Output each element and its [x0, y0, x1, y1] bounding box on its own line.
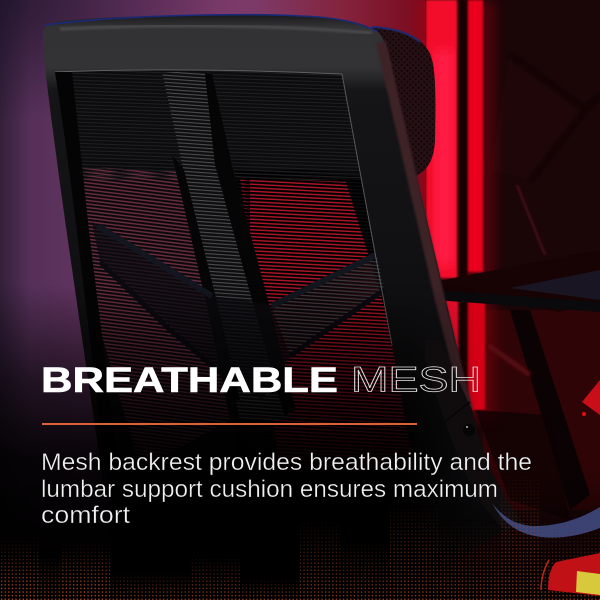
- red neon light stripes: [415, 0, 495, 420]
- bottom dark fade over left and centre: [0, 294, 476, 600]
- title: MESH: [351, 360, 481, 400]
- chair lower frame and seat: [425, 340, 600, 538]
- desk: [433, 250, 600, 520]
- bottom fade across right: [0, 470, 600, 600]
- lamp in bottom right corner: [541, 553, 600, 596]
- description text: Mesh backrest provides breathability and the: [41, 449, 532, 476]
- dotted orange equaliser pattern: [0, 470, 600, 600]
- central vertical mesh strip: [162, 72, 296, 420]
- description text: lumbar support cushion ensures maximum: [41, 476, 498, 503]
- description text: [41, 449, 532, 529]
- mesh backrest: [55, 69, 414, 470]
- divider line: [42, 423, 417, 425]
- chair back frame: [43, 15, 520, 600]
- title: BREATHABLE: [41, 361, 338, 400]
- headrest: [372, 27, 435, 179]
- title: [41, 360, 481, 400]
- description text: comfort: [41, 502, 130, 529]
- lumbar support V band: [92, 222, 384, 400]
